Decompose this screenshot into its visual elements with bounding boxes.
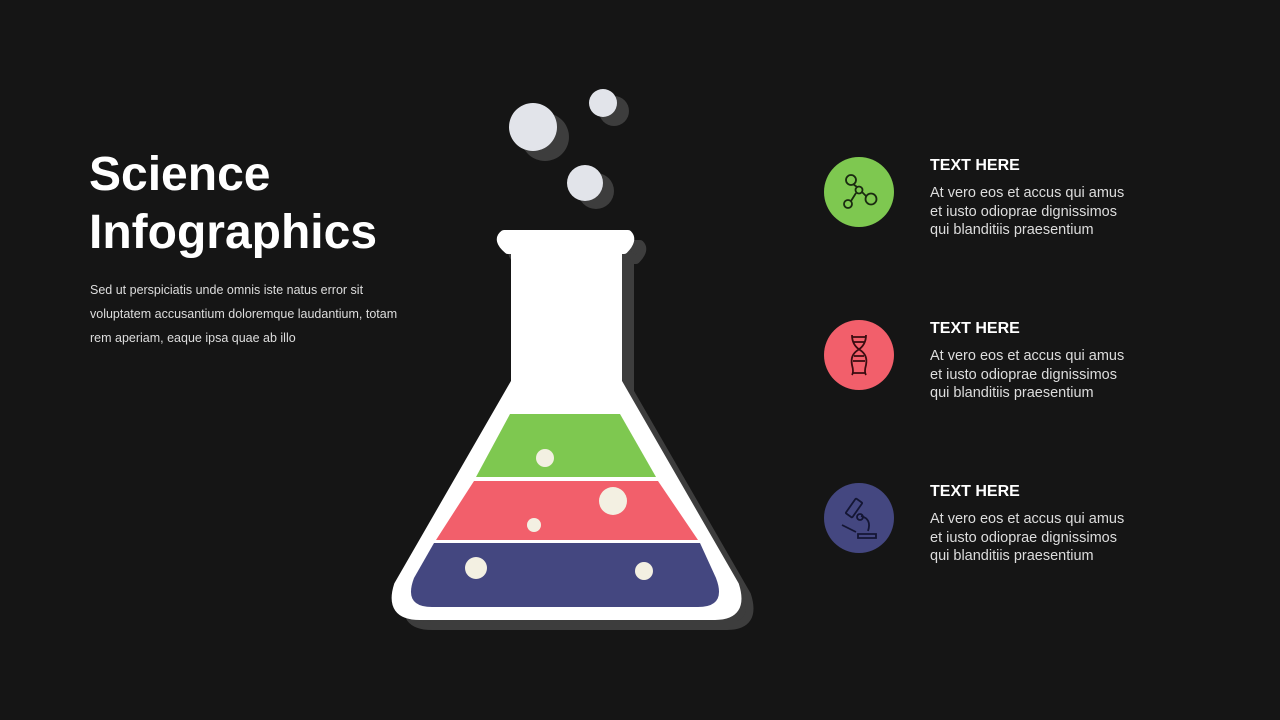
heading: TEXT HERE bbox=[930, 320, 1020, 337]
body text: et iusto odioprae dignissimos bbox=[930, 530, 1117, 546]
icon: dna bbox=[824, 320, 894, 390]
body text bbox=[930, 185, 1124, 238]
item 1 bbox=[824, 157, 1124, 238]
bubbles bbox=[509, 89, 629, 209]
title: Science bbox=[89, 148, 270, 201]
body text: At vero eos et accus qui amus bbox=[930, 348, 1124, 364]
icon: molecule bbox=[824, 157, 894, 227]
heading: TEXT HERE bbox=[930, 157, 1020, 174]
body text: et iusto odioprae dignissimos bbox=[930, 366, 1117, 382]
body text: qui blanditiis praesentium bbox=[930, 385, 1094, 401]
item 3 bbox=[824, 483, 1124, 564]
body text: qui blanditiis praesentium bbox=[930, 548, 1094, 564]
body text bbox=[930, 511, 1124, 564]
title: Infographics bbox=[89, 206, 377, 259]
body text: At vero eos et accus qui amus bbox=[930, 511, 1124, 527]
description text: Sed ut perspiciatis unde omnis iste natus error sit voluptatem accusantium doloremque laudantium, totam rem aperiam, eaque ipsa quae ab illo bbox=[90, 283, 397, 345]
item 2 bbox=[824, 320, 1124, 401]
heading: TEXT HERE bbox=[930, 483, 1020, 500]
flask body bbox=[396, 234, 750, 626]
body text: qui blanditiis praesentium bbox=[930, 222, 1094, 238]
body text: At vero eos et accus qui amus bbox=[930, 185, 1124, 201]
icon: microscope bbox=[824, 483, 894, 553]
title bbox=[89, 148, 377, 259]
body text bbox=[930, 348, 1124, 401]
liquid layers bbox=[411, 414, 719, 607]
body text: et iusto odioprae dignissimos bbox=[930, 204, 1117, 220]
